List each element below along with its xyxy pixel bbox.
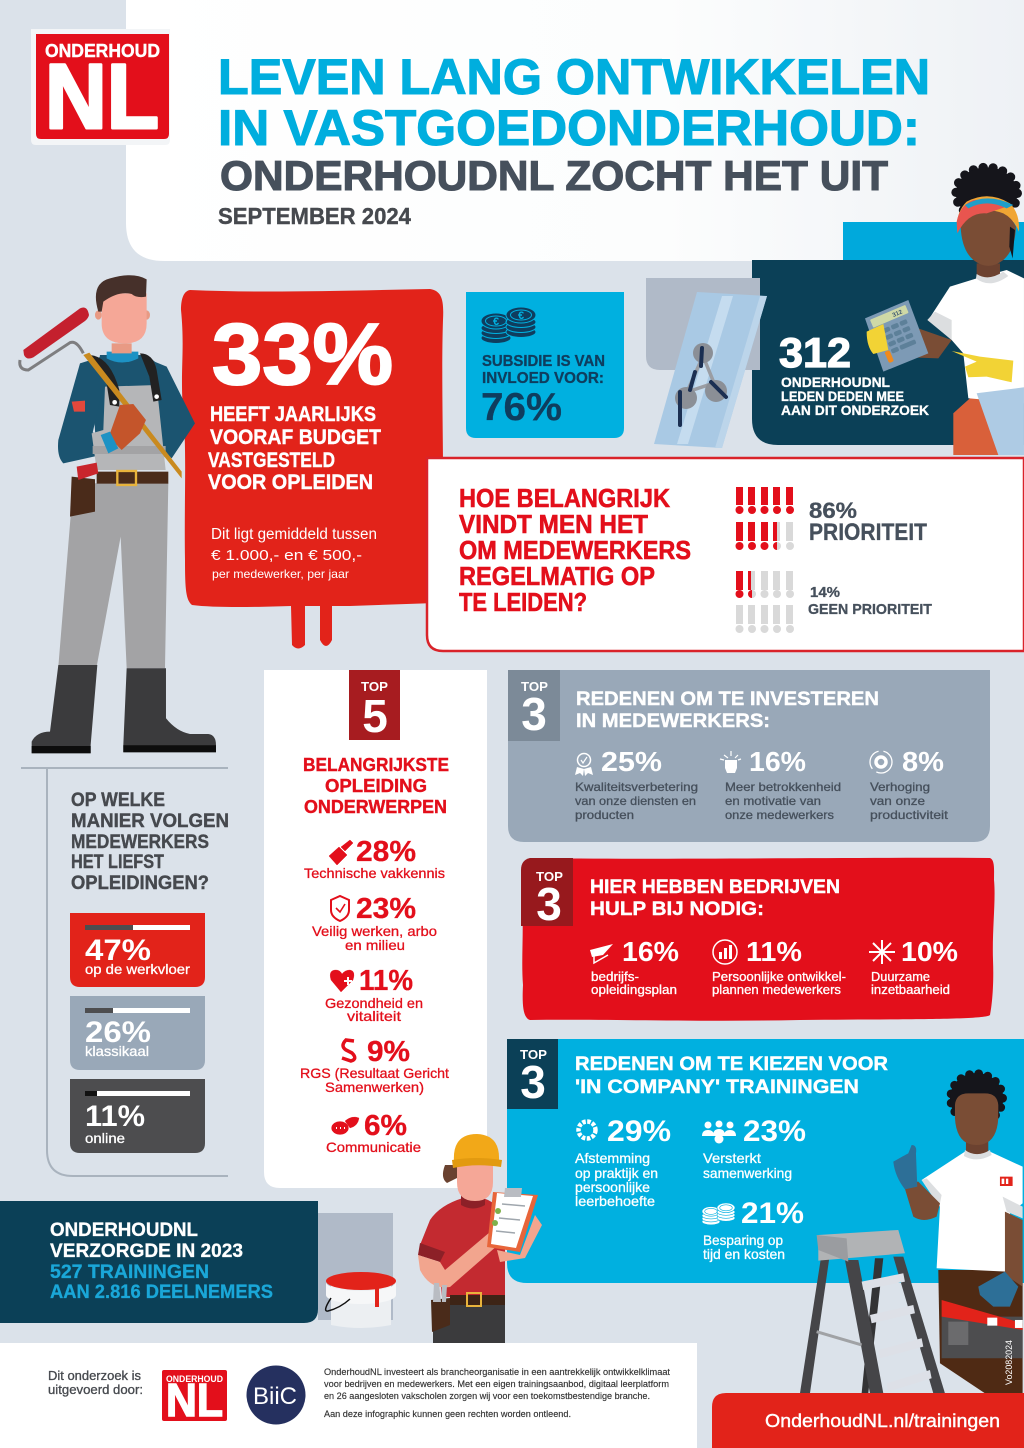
item: inzetbaarheid [869,936,958,997]
heading: question: TE LEIDEN? [459,587,587,617]
item: 8 percent productiviteit: 8% [902,746,944,777]
heading: hulp bij nodig: HIER HEBBEN BEDRIJVEN [590,876,840,898]
code: version: Vo2082024 [1004,1340,1014,1385]
stat: subsidie 76 percent: 76% [481,386,562,429]
item: afstemming: persoonlijke [575,1179,650,1195]
item: opleidingsplan [590,936,679,997]
panel: trainingen 2023 [0,1201,393,1323]
item: samenwerking: samenwerking [703,1165,792,1181]
heading: hulp bij nodig [590,876,840,920]
illustration: glass pane with suction lifter [646,278,767,448]
icon: euro coins: € [518,310,524,322]
item: communicatie [326,1110,421,1155]
card: 26 percent [70,996,205,1070]
footer: logo BiiC [246,1366,306,1424]
heading: op welke manier [71,790,229,894]
heading: in company [575,1053,888,1098]
title: SEPTEMBER 2024 [218,203,411,229]
card: 47 percent [70,913,205,987]
heading: question: HOE BELANGRIJK [459,483,670,513]
item: inzetbaarheid: inzetbaarheid [871,983,950,997]
item: opleidingsplan: 16% [622,936,679,967]
stat: subsidie 76 percent [481,353,605,429]
heading: question: REGELMATIG OP [459,561,655,591]
call to action: website [712,1393,1024,1448]
badge: top 3 red: 3 [536,878,562,930]
heading: op welke manier: OPLEIDINGEN? [71,873,209,894]
panel: trainingen 2023: VERZORGDE IN 2023 [50,1241,243,1262]
card: 26 percent: klassikaal [85,1043,149,1059]
heading: op welke manier: MANIER VOLGEN [71,811,229,832]
item: opleidingsplan: opleidingsplan [591,983,677,997]
heading: redenen om te investeren: REDENEN OM TE INVESTEREN [576,688,879,710]
call to action: website: OnderhoudNL.nl/trainingen [765,1411,1000,1431]
stat text: 33 percent: € 1.000,- en € 500,- [211,548,362,564]
item: afstemming [575,1115,671,1209]
heading: in company: REDENEN OM TE KIEZEN VOOR [575,1053,888,1075]
badge: top 3 grey: 3 [521,688,547,740]
badge: top 5: 5 [362,690,388,742]
stat text: 33 percent [208,307,393,581]
panel: trainingen 2023: ONDERHOUDNL [50,1220,198,1241]
heading: question [459,483,691,617]
icon: euro coins [481,307,536,344]
heading: op welke manier: HET LIEFST [71,852,164,873]
stat text: 33 percent: HEEFT JAARLIJKS [210,403,376,426]
item: inzetbaarheid: Duurzame [871,970,930,984]
stat text: 33 percent: VOORAF BUDGET [210,426,381,449]
title [218,49,930,229]
card: 11 percent: 11% [85,1100,145,1133]
heading: op welke manier: MEDEWERKERS [71,832,209,853]
item: ontwikkelplannen: Persoonlijke ontwikkel- [712,970,846,984]
item: samenwerking: Versterkt [703,1150,761,1166]
item: RGS: RGS (Resultaat Gericht [300,1065,449,1081]
item: 25 percent: Kwaliteitsverbetering [575,780,698,794]
item: ontwikkelplannen: plannen medewerkers [712,983,841,997]
item: veilig werken [312,893,437,953]
stat labels: priority [808,498,932,618]
logo: OnderhoudNL: ONDERHOUD [45,41,160,61]
heading: belangrijkste onderwerpen: OPLEIDING [325,776,427,796]
item: afstemming: 29% [607,1115,671,1148]
item: technische vakkennis: Technische vakkennis [304,865,445,881]
item: RGS: Samenwerken) [325,1079,424,1095]
panel: trainingen 2023: 527 TRAININGEN [50,1262,209,1283]
heading: belangrijkste onderwerpen: ONDERWERPEN [304,797,447,817]
item: 16 percent motivatie: Meer betrokkenheid [725,780,841,794]
badge: top 3 grey: TOP [521,679,548,694]
item: RGS: 9% [367,1036,410,1068]
stat text: 33 percent: per medewerker, per jaar [212,567,349,581]
heading: hulp bij nodig: HULP BIJ NODIG: [590,898,764,920]
footer: dit onderzoek text: uitgevoerd door: [48,1383,143,1397]
item: afstemming: leerbehoefte [575,1193,655,1209]
panel: top 5 onderwerpen [264,670,487,1188]
panel: 312 participants backing [752,222,1024,445]
heading: question: VINDT MEN HET [459,509,648,539]
title: ONDERHOUDNL ZOCHT HET UIT [220,152,888,199]
stat: 312 members [779,329,929,418]
badge: top 5: TOP [361,679,388,694]
footer: logo onderhoudNL: ONDERHOUD [166,1374,223,1384]
stat text: 33 percent: VOOR OPLEIDEN [208,471,373,494]
pictogram: 14 percent no priority [736,571,794,633]
item: 8 percent productiviteit: van onze [870,794,925,808]
item: besparing: tijd en kosten [703,1246,785,1262]
item: 16 percent motivatie: onze medewerkers [725,808,834,822]
footer: dit onderzoek text: Dit onderzoek is [48,1369,141,1383]
item: communicatie: Communicatie [326,1139,421,1155]
item: besparing: 21% [741,1197,804,1230]
card: 26 percent: 26% [85,1016,151,1049]
item: 16 percent motivatie: 16% [749,746,806,777]
stat: 312 members: 312 [779,329,851,376]
illustration: paint bucket [326,1272,396,1328]
stat: 312 members: LEDEN DEDEN MEE [781,388,904,404]
item: gezondheid: vitaliteit [347,1008,401,1024]
card: 11 percent: online [85,1130,125,1146]
stat text: 33 percent: 33% [212,307,393,403]
panel: top 3 investeren [508,670,990,842]
item: 25 percent: producten [575,808,634,822]
title: IN VASTGOEDONDERHOUD: [218,100,920,156]
footer panel [0,1343,697,1448]
panel: subsidie [466,292,624,438]
footer: disclaimer text: en 26 aangesloten vakscholen zorgen wij voor een toekomstbestendige branche. [324,1391,650,1401]
card: 47 percent: op de werkvloer [85,961,190,977]
heading: in company: 'IN COMPANY' TRAININGEN [575,1076,859,1098]
stat: subsidie 76 percent: SUBSIDIE IS VAN [482,353,605,370]
panel: hoe belangrijk [427,458,1024,651]
footer: disclaimer text: Aan deze infographic kunnen geen rechten worden ontleend. [324,1409,571,1419]
card: 11 percent [70,1079,205,1153]
item: gezondheid: 11% [359,965,413,997]
heading: redenen om te investeren: IN MEDEWERKERS: [576,710,770,732]
illustration: woman with calculator: 312 [892,309,904,319]
footer: logo BiiC: BiiC [253,1383,297,1410]
panel: top 3 hulp nodig [521,858,995,1021]
item: veilig werken: Veilig werken, arbo [312,923,437,939]
item: 8 percent productiviteit: productiviteit [870,808,949,822]
badge: top 3 navy: 3 [520,1056,546,1108]
stat text: 33 percent: VASTGESTELD [208,449,335,472]
heading: op welke manier: OP WELKE [71,790,165,811]
item: samenwerking: 23% [743,1115,806,1148]
badge: top 3 red [521,858,573,930]
logo: OnderhoudNL: NL [45,46,159,148]
item: veilig werken: en milieu [345,937,405,953]
item: 25 percent [575,746,698,822]
item: ontwikkelplannen: 11% [746,936,802,967]
item: RGS [300,1036,449,1095]
badge: top 5 [349,670,400,742]
item: ontwikkelplannen [712,936,846,997]
icon: euro coins: € [493,316,499,328]
stat labels: priority: PRIORITEIT [809,519,927,546]
panel: trainingen 2023: AAN 2.816 DEELNEMERS [50,1282,273,1303]
item: samenwerking [702,1115,806,1181]
stat: subsidie 76 percent: INVLOED VOOR: [482,370,604,387]
item: technische vakkennis [304,836,445,881]
item: gezondheid [325,965,423,1024]
item: inzetbaarheid: 10% [901,936,958,967]
illustration: woman with calculator [865,167,1024,455]
item: veilig werken: 23% [356,893,416,925]
heading: belangrijkste onderwerpen: BELANGRIJKSTE [303,755,449,775]
footer: dit onderzoek text [48,1369,143,1397]
item: besparing: Besparing op [703,1232,783,1248]
stat: 312 members: ONDERHOUDNL [781,374,890,390]
heading: belangrijkste onderwerpen [303,755,449,817]
item: 16 percent motivatie [720,746,841,822]
pictogram: 86 percent priority [736,487,794,550]
item: communicatie: 6% [364,1110,407,1142]
illustration: painter with roller [20,275,216,753]
item: 8 percent productiviteit [870,746,949,822]
stat: 312 members: AAN DIT ONDERZOEK [781,402,929,418]
panel: manier van opleiden [21,768,229,1176]
header panel [126,0,1024,261]
illustration: man with thumbs up, ladder and toolbox [800,1073,1023,1397]
footer: disclaimer text: OnderhoudNL investeert als brancheorganisatie in een aantrekkelijk ontwikkelklimaat [324,1367,671,1377]
item: 25 percent: 25% [601,746,662,777]
item: afstemming: Afstemming [575,1150,650,1166]
stat labels: priority: 86% [809,498,857,523]
badge: top 3 navy [507,1039,558,1109]
title: LEVEN LANG ONTWIKKELEN [218,49,930,105]
item: 16 percent motivatie: en motivatie van [725,794,821,808]
footer: logo onderhoudNL: NL [166,1374,223,1426]
panel: top budget, red paint block [181,289,443,648]
badge: top 3 navy: TOP [520,1047,547,1062]
item: 8 percent productiviteit: Verhoging [870,780,930,794]
item: besparing [702,1197,804,1262]
stat labels: priority: 14% [810,584,840,601]
illustration: woman with clipboard [418,1134,542,1343]
stat labels: priority: GEEN PRIORITEIT [808,601,932,618]
card: 47 percent: 47% [85,934,151,967]
heading: redenen om te investeren [576,688,879,732]
heading: question: OM MEDEWERKERS [459,535,691,565]
stat text: 33 percent: Dit ligt gemiddeld tussen [211,526,377,543]
badge: top 3 grey [508,670,560,741]
item: 25 percent: van onze diensten en [575,794,696,808]
panel: top 3 in company [507,1039,1024,1283]
item: afstemming: op praktijk en [575,1165,658,1181]
item: technische vakkennis: 28% [356,836,416,868]
footer: disclaimer text [324,1367,671,1419]
footer: disclaimer text: voor bedrijven en medewerkers. Met een eigen trainingsaanbod, digitaal leerplatform [324,1379,669,1389]
item: gezondheid: Gezondheid en [325,995,423,1011]
badge: top 3 red: TOP [536,869,563,884]
item: opleidingsplan: bedrijfs- [591,970,639,984]
